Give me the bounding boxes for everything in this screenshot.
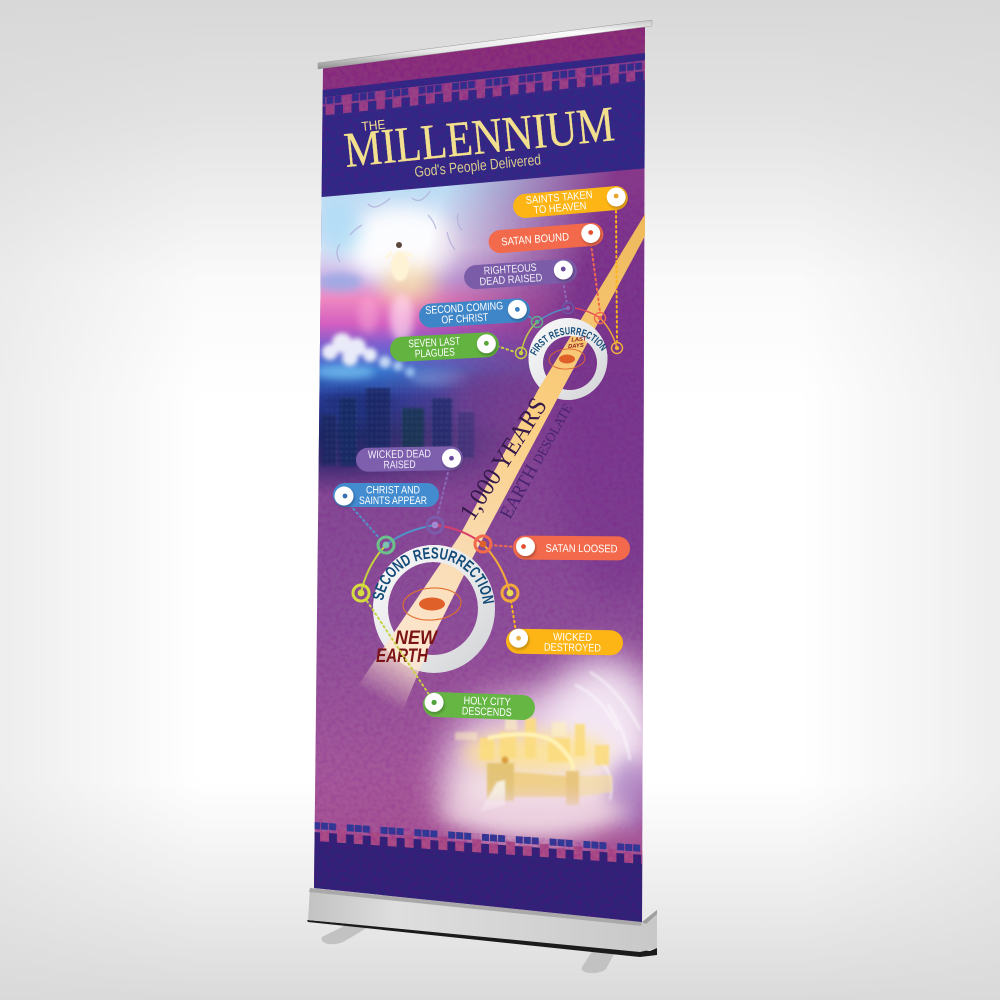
node: righteous dead raised [562, 302, 574, 314]
night city skyline [322, 380, 474, 466]
pill: seven last plagues: PLAGUES [415, 346, 455, 361]
pill: holy city descends [423, 692, 535, 720]
ring: first resurrection (full) [528, 318, 608, 400]
label: earth desolate: EARTH DESOLATE [496, 399, 577, 522]
ring top overlay: first [528, 318, 608, 358]
pill: second coming of christ [418, 298, 531, 328]
pill: saints taken to heaven: SAINTS TAKEN [525, 189, 593, 207]
second resurrection connectors [350, 468, 517, 696]
label: new earth: EARTH [376, 646, 429, 667]
pill: christ and saints appear: SAINTS APPEAR [359, 495, 427, 507]
base shadow [307, 920, 657, 957]
pill: wicked dead raised: WICKED DEAD [368, 448, 431, 461]
doves [337, 191, 462, 262]
node: wicked dead [427, 517, 443, 533]
pill: wicked destroyed [506, 628, 623, 656]
pill: christ and saints appear: CHRIST AND [366, 484, 420, 496]
pill: wicked dead raised [356, 446, 463, 472]
paper texture: top [322, 28, 645, 197]
sky scene: Christ returning [318, 172, 608, 492]
pill: seven last plagues: SEVEN LAST [408, 336, 461, 350]
label: new earth [376, 628, 439, 667]
banner [314, 27, 645, 922]
first resurrection connectors [497, 206, 617, 353]
pill: holy city descends: HOLY CITY [463, 695, 511, 709]
pill: saints taken to heaven: TO HEAVEN [533, 200, 587, 217]
bottom dark band [314, 832, 642, 922]
pill: second coming of christ: SECOND COMING [425, 300, 504, 317]
pill: righteous dead raised [463, 258, 578, 290]
label: new earth: NEW [395, 628, 439, 649]
title: THE: THE [361, 117, 386, 134]
base foot: right [582, 950, 615, 973]
pill: saints taken to heaven [512, 185, 629, 219]
ring label: second resurrection: SECOND RESURRECTION [372, 547, 494, 604]
pill: righteous dead raised: DEAD RAISED [479, 272, 543, 288]
upper blue stripe [322, 53, 645, 98]
title block [342, 95, 617, 181]
title: MILLENNIUM: MILLENNIUM [342, 95, 617, 178]
node: second coming [532, 316, 542, 328]
marker: last days [548, 348, 586, 370]
clouds [322, 333, 415, 377]
pill: satan bound [488, 222, 604, 254]
pill: second coming of christ: OF CHRIST [441, 312, 489, 327]
pill: christ and saints appear [333, 483, 439, 508]
ring: second resurrection (full) [373, 545, 495, 673]
subtitle: God's People Delivered [414, 151, 542, 181]
node: satan loosed [475, 536, 491, 552]
top rail [318, 20, 652, 69]
pill: satan bound: SATAN BOUND [501, 231, 570, 249]
node: christ and saints [378, 537, 394, 553]
node: seven last plagues [516, 348, 526, 358]
pill: seven last plagues [389, 332, 500, 362]
pill: satan loosed: SATAN LOOSED [545, 543, 618, 555]
banner background [314, 27, 645, 922]
ring top overlay: second [373, 545, 495, 606]
label: last days: DAYS [568, 343, 584, 350]
label: 1,000 years: 1,000 YEARS [454, 392, 553, 525]
node: saints taken [612, 342, 622, 354]
ring label: first resurrection: FIRST RESURRECTION [530, 327, 608, 356]
base foot: left [322, 923, 370, 944]
beam timeline [355, 214, 645, 712]
node: holy city [353, 585, 369, 601]
pill: righteous dead raised: RIGHTEOUS [483, 262, 537, 278]
paper texture: bottom [314, 823, 642, 920]
holy city scene [440, 657, 660, 831]
label: last days: LAST [571, 336, 587, 344]
Christ figure [386, 242, 412, 281]
pill: wicked destroyed: DESTROYED [544, 642, 601, 655]
retractable base [308, 888, 657, 952]
pill: satan loosed [513, 535, 630, 561]
bottom checker pattern [313, 822, 643, 865]
label: last days [568, 336, 587, 350]
city walls and towers [455, 718, 612, 812]
node: wicked destroyed [502, 585, 518, 601]
pill: holy city descends: DESCENDS [462, 705, 512, 719]
marker: new earth [402, 586, 462, 622]
top checker pattern [322, 60, 645, 116]
pill: wicked destroyed: WICKED [553, 631, 592, 644]
node: satan bound [594, 312, 606, 324]
top header band [322, 71, 645, 197]
pill: wicked dead raised: RAISED [384, 459, 416, 471]
